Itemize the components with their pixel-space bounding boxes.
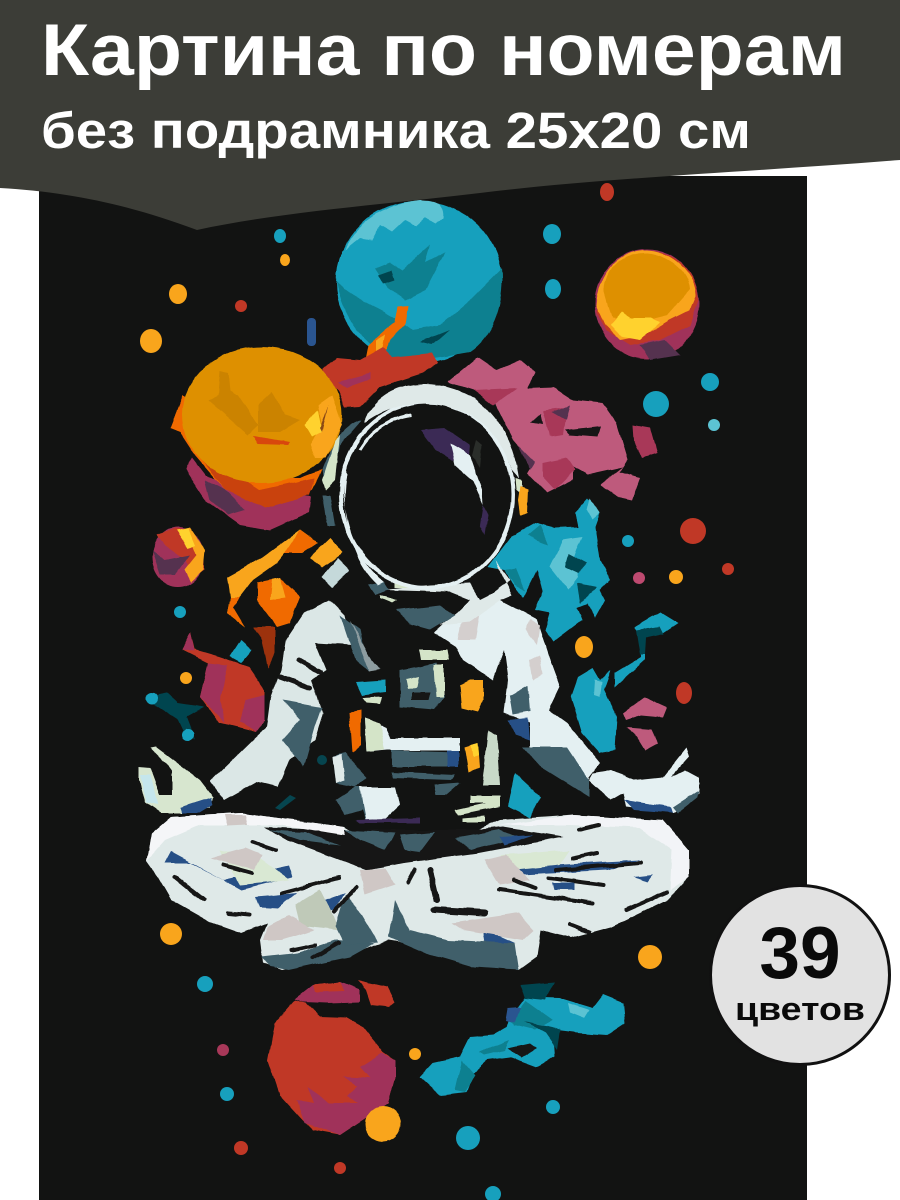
planet: large teal top	[336, 200, 503, 363]
astronaut: waist teal patches	[270, 830, 520, 852]
badge label: цветов	[735, 991, 865, 1027]
nebula: helmet side yellow	[310, 538, 343, 568]
astronaut: leg dark lines	[175, 825, 667, 958]
astronaut: right arm	[434, 600, 600, 790]
nebula: orange left	[227, 530, 318, 627]
planet: small left	[152, 527, 205, 587]
astronaut: left arm black creases	[280, 660, 320, 688]
astronaut: right leg highlight	[500, 815, 689, 890]
astronaut: left arm	[210, 600, 352, 800]
nebula: pink	[448, 357, 640, 500]
block: pale collar piece	[322, 558, 350, 587]
subtitle: без подрамника 25х20 см	[41, 102, 751, 159]
nebula: pink accent	[633, 425, 657, 458]
astronaut: left foot shading	[261, 940, 374, 970]
nebula: pink small right	[623, 697, 667, 750]
planet: red band under teal planet	[323, 347, 438, 408]
planet: large orange left	[170, 347, 342, 530]
astronaut: right glove	[589, 748, 699, 813]
astronaut: left arm shading	[282, 615, 370, 767]
astronaut: left leg top highlight	[147, 813, 345, 860]
astronaut	[139, 384, 699, 970]
astronaut: legs	[147, 813, 689, 970]
nebula: teal right	[487, 498, 610, 642]
astronaut: leg pale green and grey patches	[210, 815, 570, 940]
header banner	[0, 0, 900, 230]
dots: scattered stars	[140, 183, 734, 1200]
illustration: space scene	[139, 200, 699, 1142]
planet: red bottom	[268, 980, 401, 1142]
astronaut: waist dark band	[265, 827, 563, 870]
badge: colour count	[710, 886, 890, 1064]
astronaut: helmet	[322, 384, 528, 588]
teal pocket: right of torso	[508, 773, 541, 818]
astronaut: leg navy shading	[165, 835, 652, 947]
astronaut: right arm shading	[458, 610, 589, 797]
nebula: teal bottom	[420, 982, 625, 1095]
nebula: dark orange	[253, 627, 275, 668]
nebula: small teal	[230, 640, 252, 663]
badge number: 39	[759, 913, 841, 994]
planet: orange top right	[595, 249, 699, 360]
astronaut: left glove	[139, 747, 213, 813]
title: Картина по номерам	[41, 10, 846, 91]
panel: black canvas	[39, 176, 807, 1200]
astronaut: chest panel	[332, 620, 500, 823]
nebula: teal right lower	[571, 612, 678, 753]
astronaut: collar	[368, 560, 512, 630]
nebula: dark teal left	[146, 692, 204, 741]
astronaut: right foot shading	[389, 900, 519, 970]
astronaut: centre shin shading	[335, 895, 378, 945]
nebula: red left	[182, 633, 265, 732]
